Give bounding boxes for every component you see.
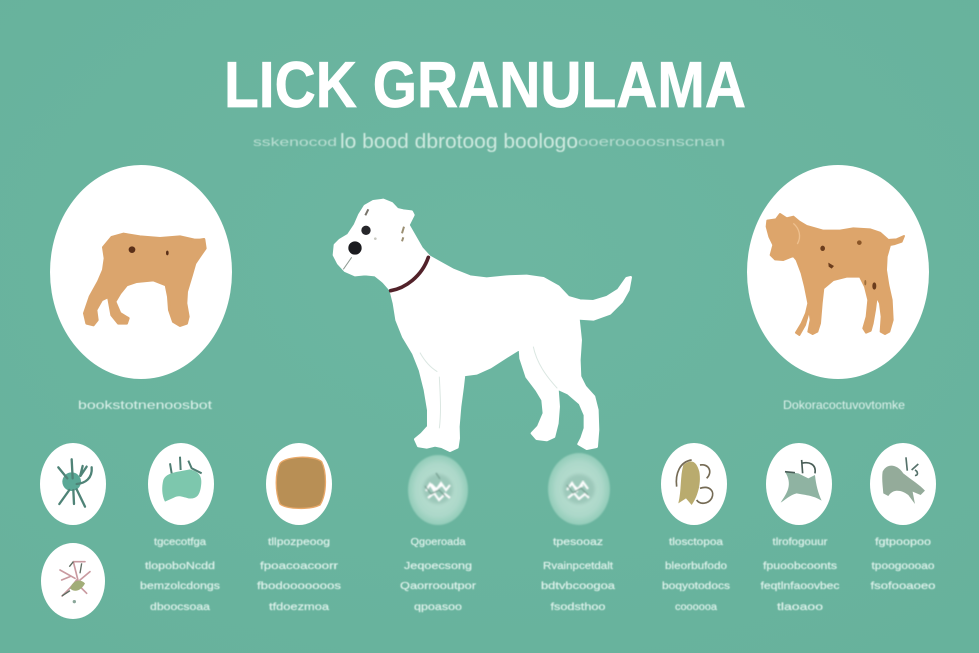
panel: left caption: bookstotnenoosbot: [78, 398, 213, 412]
text block: column 6: fpuoobcoonts: [763, 560, 837, 572]
text block: column 5: bleorbufodo: [665, 560, 727, 572]
icon: left pale lesion under front paw: [408, 455, 468, 525]
text block: column 6: [760, 536, 840, 613]
text block: column 4: tpesooaz: [553, 536, 603, 548]
text block: column 2: tfdoezmoa: [269, 601, 329, 613]
text block: column 1: bemzolcdongs: [140, 580, 220, 592]
text block: column 1: dboocsoaa: [150, 601, 210, 613]
text block: column 2: fpoacoacoorr: [260, 560, 339, 572]
body shading lines: [420, 347, 557, 428]
text block: column 3: [400, 536, 477, 613]
text block: column 7: [870, 536, 936, 592]
text block: column 7: tpoogoooao: [872, 560, 935, 572]
icon: right pale lesion under hind paw: [548, 453, 610, 525]
text block: column 5: [662, 536, 730, 613]
illustration: white dog with collar: [334, 200, 631, 451]
icon circle: tan mite with loops: [661, 443, 727, 525]
collar: [391, 257, 428, 291]
text block: column 5: tlosctopoa: [669, 536, 723, 548]
subtitle: [253, 131, 725, 153]
title: LICK GRANULAMA: [224, 48, 746, 121]
icon circle: grey-green animal shape: [870, 443, 936, 525]
text block: column 4: [541, 536, 615, 613]
text block: column 1: tgcecotfga: [154, 536, 206, 548]
text block: column 3: Qgoeroada: [410, 536, 466, 548]
text block: column 4: fsodsthoo: [550, 601, 606, 613]
panel: right circle with tan dog: [747, 165, 929, 379]
icon: tan curly dog with lesions: [767, 214, 904, 335]
text block: column 5: boqyotodocs: [662, 580, 730, 592]
text block: column 6: tlaoaoo: [777, 601, 823, 613]
text block: column 3: qpoasoo: [414, 601, 462, 613]
text block: column 4: Rvainpcetdalt: [543, 560, 613, 572]
text block: column 6: feqtlnfaoovbec: [760, 580, 840, 592]
text block: column 2: [257, 536, 341, 613]
text block: column 4: bdtvbcoogoa: [541, 580, 615, 592]
text block: column 3: Qaorrooutpor: [400, 580, 477, 592]
icon circle: tan patch: [266, 443, 332, 525]
panel: left circle with tan dog: [50, 165, 232, 379]
text block: column 6: tlrofogouur: [772, 536, 828, 548]
text block: column 1: [140, 536, 220, 613]
subtitle: ooeroooosnscnan: [578, 134, 725, 149]
icon circle: grey-green star shape: [766, 443, 832, 525]
text block: column 2: tllpozpeoog: [268, 536, 330, 548]
text block: column 2: fbodooooooos: [257, 580, 341, 592]
text block: column 3: Jeqoecsong: [404, 560, 472, 572]
text block: column 5: coooooa: [675, 601, 717, 613]
text block: column 7: fsofooaoeo: [870, 580, 936, 592]
icon circle: green tissue: [148, 443, 214, 525]
icon: tan dog body with two lesions: [84, 234, 205, 326]
icon circle: branching lesion: [41, 543, 105, 619]
subtitle: lo bood dbrotoog boologo: [340, 131, 578, 153]
panel: right caption: Dokoracoctuvovtomke: [783, 398, 905, 412]
subtitle: sskenocod: [253, 135, 337, 149]
face details: [348, 241, 362, 255]
text block: column 7: fgtpoopoo: [875, 536, 931, 548]
text block: column 1: tlopoboNcdd: [145, 560, 215, 572]
icon circle: parasite dark strands: [40, 443, 106, 525]
